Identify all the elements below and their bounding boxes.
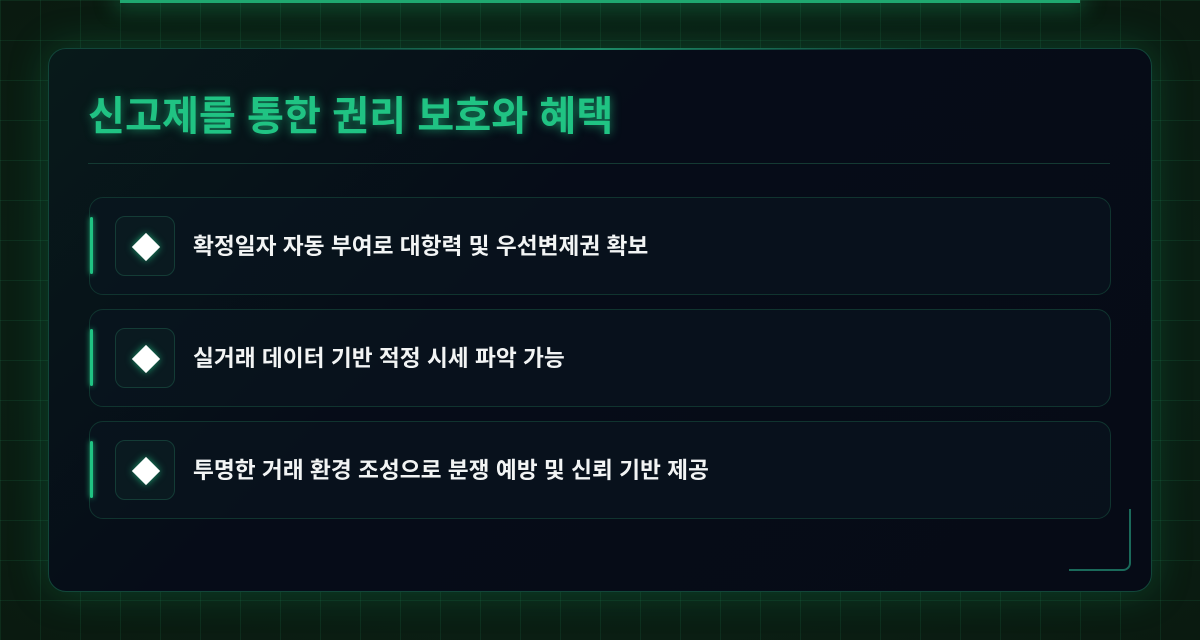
item 1 — [89, 197, 1111, 295]
title: 신고제를 통한 권리 보호와 혜택 — [88, 94, 613, 139]
item 3 — [89, 421, 1111, 519]
icon: diamond — [115, 216, 175, 276]
text: item 2: 실거래 데이터 기반 적정 시세 파악 가능 — [193, 345, 565, 371]
icon: diamond — [115, 328, 175, 388]
icon: diamond — [115, 440, 175, 500]
text: item 3: 투명한 거래 환경 조성으로 분쟁 예방 및 신뢰 기반 제공 — [193, 457, 709, 483]
panel: main card — [48, 48, 1152, 592]
text: item 1: 확정일자 자동 부여로 대항력 및 우선변제권 확보 — [193, 233, 648, 259]
corner bracket — [1069, 509, 1131, 571]
item 2 — [89, 309, 1111, 407]
